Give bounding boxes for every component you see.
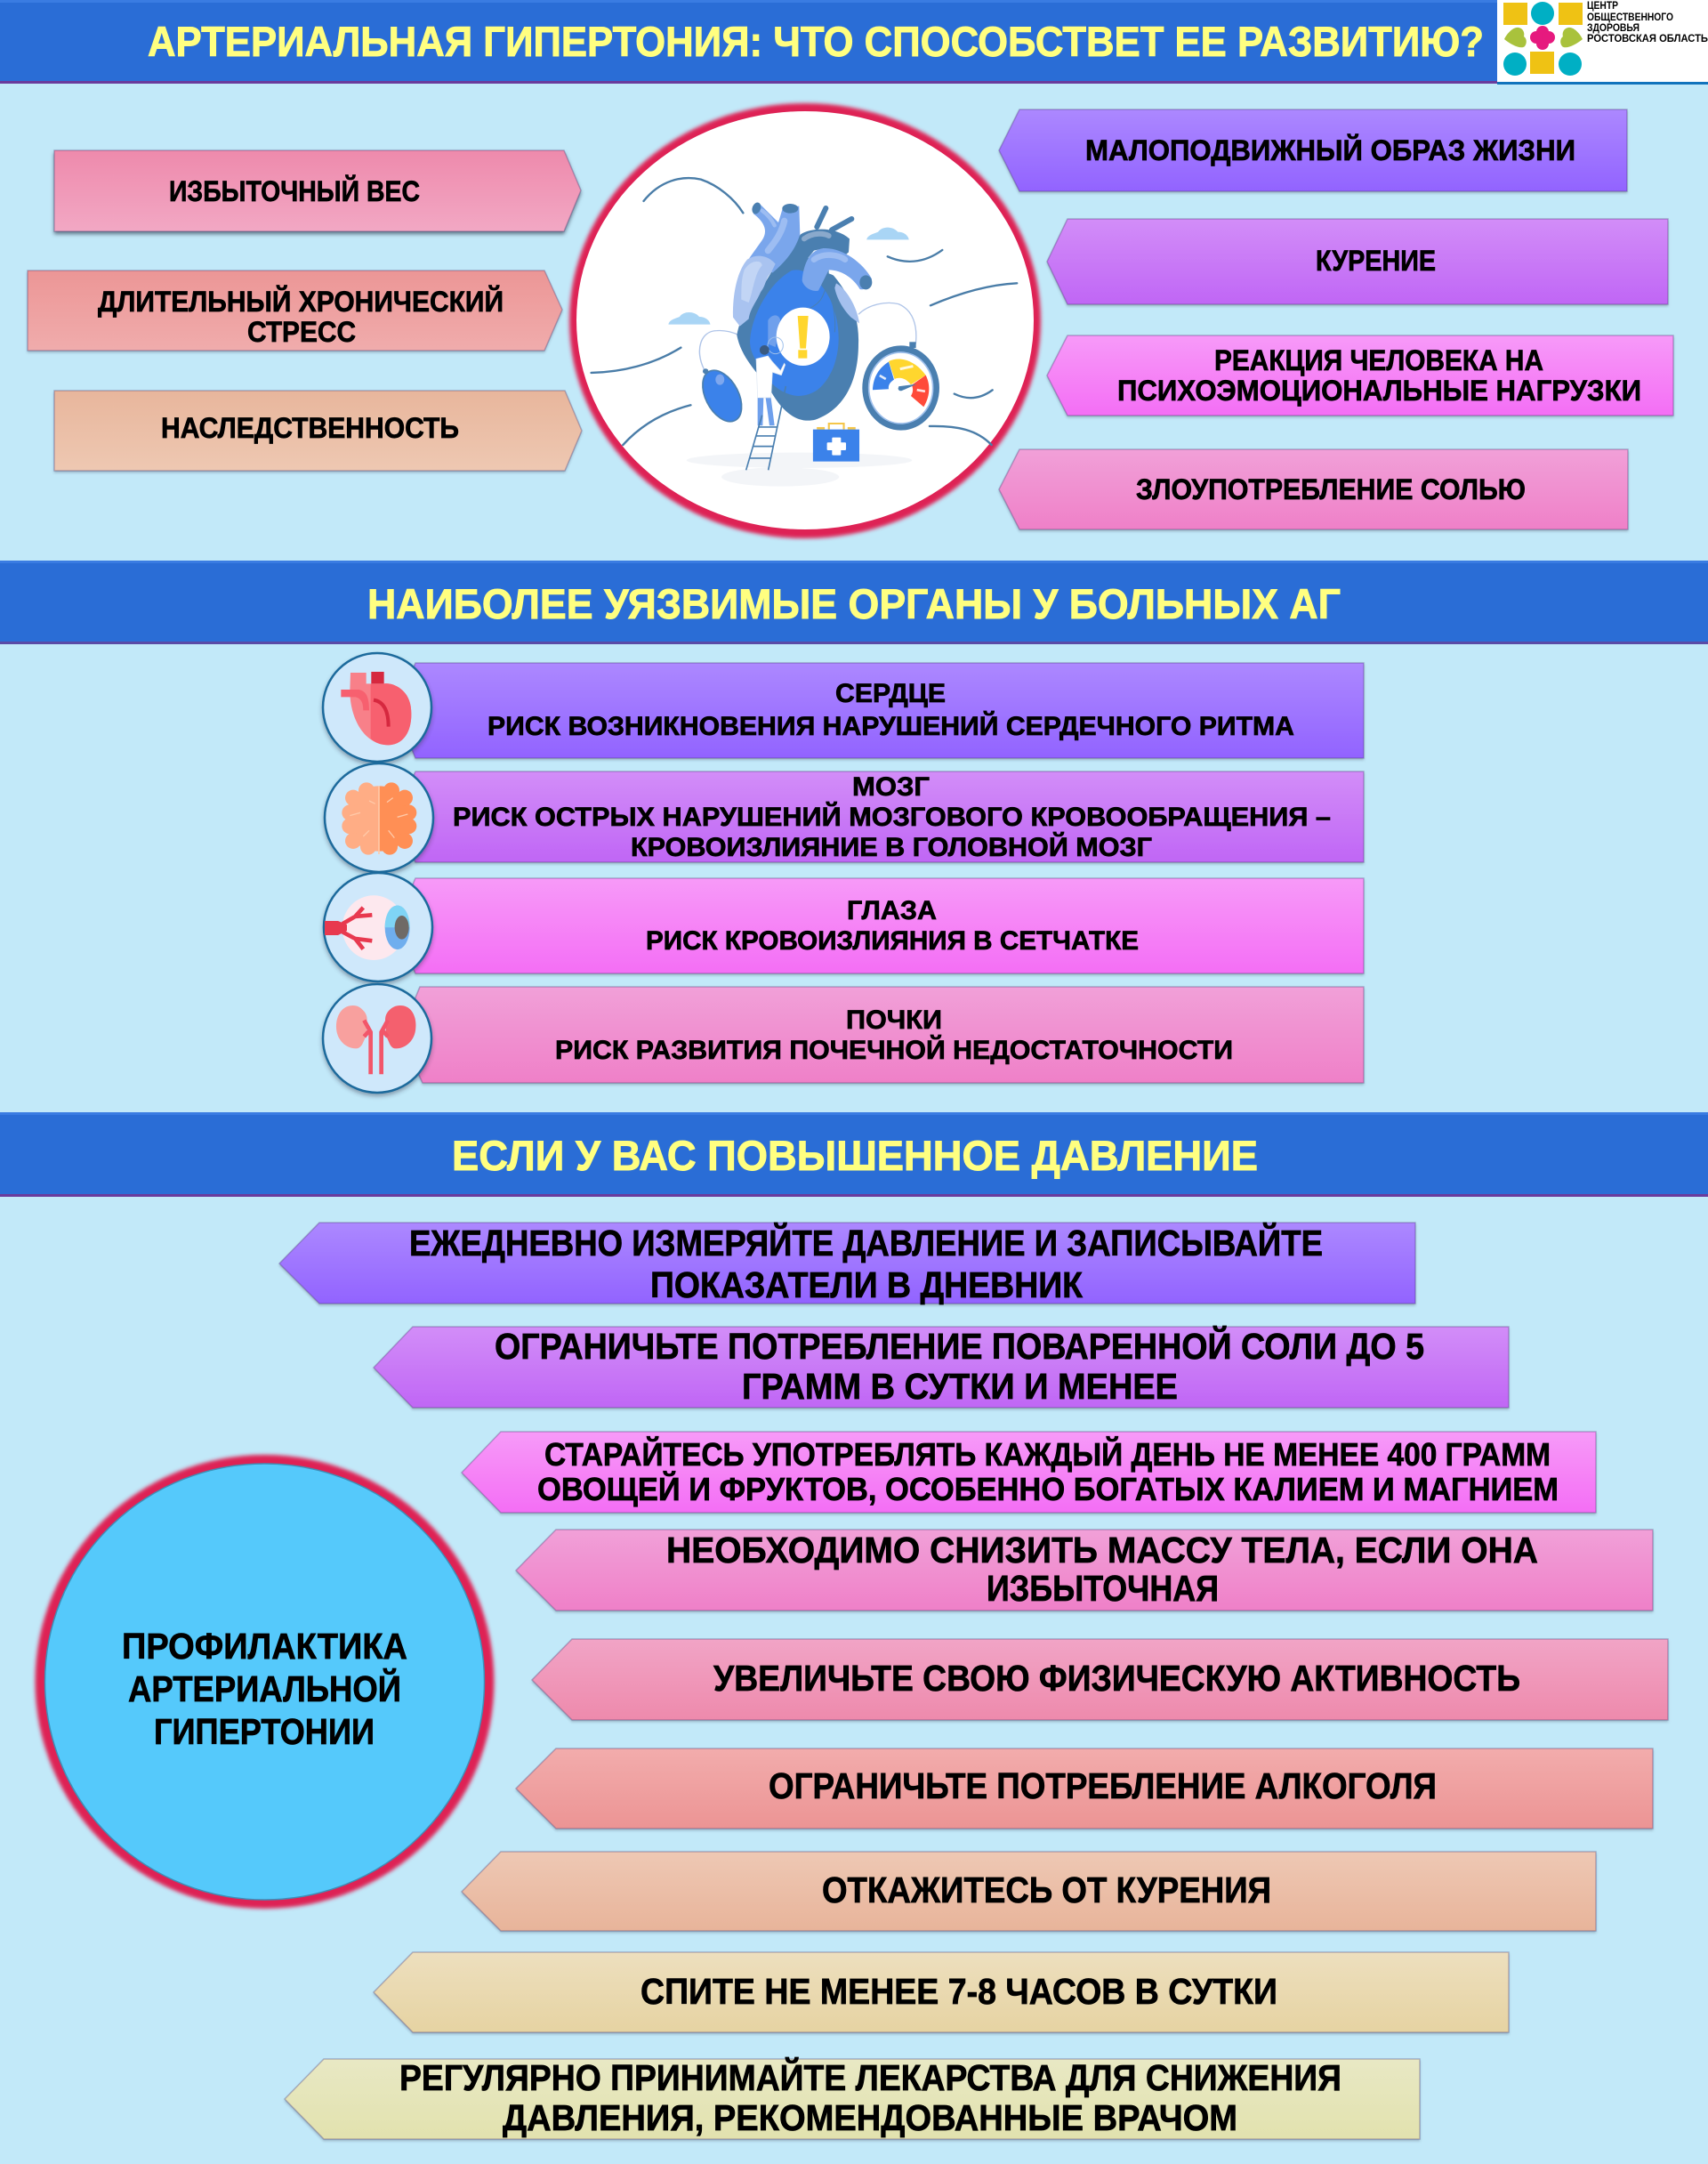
advice: ограничьте соль: ГРАММ В СУТКИ И МЕНЕЕ [742, 1366, 1178, 1407]
advice: ограничьте соль: ОГРАНИЧЬТЕ ПОТРЕБЛЕНИЕ ПОВАРЕННОЙ СОЛИ ДО 5 [495, 1326, 1424, 1367]
illustration: heart with exclamation mark, doctor, gauge [733, 201, 939, 470]
panel: risk factors left [28, 150, 582, 471]
factor: длительный хронический стресс: ДЛИТЕЛЬНЫЙ ХРОНИЧЕСКИЙ [98, 286, 504, 318]
factor: реакция на психоэмоциональные нагрузки: ПСИХОЭМОЦИОНАЛЬНЫЕ НАГРУЗКИ [1117, 375, 1641, 407]
panel: vulnerable organs [323, 653, 1364, 1093]
panel: prevention advice [279, 1223, 1668, 2139]
section banner: если у вас повышенное давление [0, 1112, 1708, 1197]
advice: лекарства: РЕГУЛЯРНО ПРИНИМАЙТЕ ЛЕКАРСТВА ДЛЯ СНИЖЕНИЯ [399, 2057, 1341, 2098]
advice: снизить массу тела: НЕОБХОДИМО СНИЗИТЬ МАССУ ТЕЛА, ЕСЛИ ОНА [666, 1530, 1538, 1571]
advice: сон: СПИТЕ НЕ МЕНЕЕ 7-8 ЧАСОВ В СУТКИ [640, 1971, 1277, 2012]
panel: risk factors right [999, 109, 1673, 529]
organ bar: мозг: РИСК ОСТРЫХ НАРУШЕНИЙ МОЗГОВОГО КРОВООБРАЩЕНИЯ – [453, 802, 1331, 832]
icon: heart [323, 653, 431, 762]
factor: курение: КУРЕНИЕ [1316, 245, 1436, 277]
advice: овощи и фрукты: ОВОЩЕЙ И ФРУКТОВ, ОСОБЕННО БОГАТЫХ КАЛИЕМ И МАГНИЕМ [537, 1470, 1559, 1507]
organ bar: почки: РИСК РАЗВИТИЯ ПОЧЕЧНОЙ НЕДОСТАТОЧНОСТИ [555, 1035, 1233, 1065]
logo: центр общественного здоровья: ЗДОРОВЬЯ [1587, 23, 1640, 34]
organ bar: почки: ПОЧКИ [846, 1005, 942, 1035]
advice: овощи и фрукты [462, 1432, 1596, 1513]
factor: малоподвижный образ жизни [999, 109, 1627, 191]
factor: злоупотребление солью: ЗЛОУПОТРЕБЛЕНИЕ СОЛЬЮ [1136, 473, 1526, 505]
header banner [0, 0, 1708, 84]
organ bar: сердце: РИСК ВОЗНИКНОВЕНИЯ НАРУШЕНИЙ СЕРДЕЧНОГО РИТМА [487, 711, 1294, 741]
advice: лекарства: ДАВЛЕНИЯ, РЕКОМЕНДОВАННЫЕ ВРАЧОМ [503, 2097, 1237, 2138]
logo: центр общественного здоровья [1497, 0, 1708, 85]
heading: НАИБОЛЕЕ УЯЗВИМЫЕ ОРГАНЫ У БОЛЬНЫХ АГ [367, 580, 1341, 627]
factor: реакция на психоэмоциональные нагрузки [1047, 335, 1673, 416]
advice: курение: ОТКАЖИТЕСЬ ОТ КУРЕНИЯ [822, 1869, 1271, 1910]
advice: снизить массу тела: ИЗБЫТОЧНАЯ [987, 1568, 1219, 1609]
advice: измеряйте давление [279, 1223, 1415, 1305]
section banner: наиболее уязвимые органы [0, 561, 1708, 644]
advice: физическая активность [532, 1639, 1668, 1720]
factor: наследственность [54, 391, 582, 471]
icon: eye [324, 873, 432, 981]
prevention circle [36, 1455, 495, 1909]
prevention title [122, 1626, 407, 1752]
advice: алкоголь: ОГРАНИЧЬТЕ ПОТРЕБЛЕНИЕ АЛКОГОЛЯ [769, 1765, 1437, 1806]
organ bar: глаза: РИСК КРОВОИЗЛИЯНИЯ В СЕТЧАТКЕ [646, 926, 1139, 956]
organ bar: мозг: МОЗГ [852, 772, 930, 802]
title: АРТЕРИАЛЬНАЯ ГИПЕРТОНИЯ: ЧТО СПОСОБСТВЕТ ЕЕ РАЗВИТИЮ? [148, 18, 1484, 65]
organ bar: глаза [396, 878, 1364, 973]
factor: избыточный вес: ИЗБЫТОЧНЫЙ ВЕС [169, 175, 420, 207]
advice: физическая активность: УВЕЛИЧЬТЕ СВОЮ ФИЗИЧЕСКУЮ АКТИВНОСТЬ [713, 1658, 1520, 1699]
prevention title: АРТЕРИАЛЬНОЙ [128, 1668, 401, 1709]
advice: измеряйте давление: ЕЖЕДНЕВНО ИЗМЕРЯЙТЕ ДАВЛЕНИЕ И ЗАПИСЫВАЙТЕ [409, 1223, 1323, 1264]
advice: ограничьте соль [374, 1326, 1509, 1408]
advice: алкоголь [516, 1748, 1653, 1829]
organ bar: сердце [396, 663, 1364, 758]
advice: снизить массу тела [516, 1530, 1653, 1611]
factor: курение [1047, 219, 1668, 304]
prevention title: ПРОФИЛАКТИКА [122, 1626, 407, 1667]
advice: курение [462, 1852, 1596, 1931]
advice: измеряйте давление: ПОКАЗАТЕЛИ В ДНЕВНИК [650, 1264, 1084, 1305]
factor: длительный хронический стресс: СТРЕСС [247, 316, 356, 348]
organ bar: глаза: ГЛАЗА [847, 896, 937, 925]
factor: реакция на психоэмоциональные нагрузки: РЕАКЦИЯ ЧЕЛОВЕКА НА [1214, 344, 1543, 376]
factor: злоупотребление солью [999, 449, 1628, 529]
icon: kidneys [323, 984, 431, 1093]
logo: центр общественного здоровья: ОБЩЕСТВЕННОГО [1587, 12, 1673, 23]
organ bar: почки [400, 987, 1364, 1083]
factor: малоподвижный образ жизни: МАЛОПОДВИЖНЫЙ ОБРАЗ ЖИЗНИ [1085, 134, 1575, 166]
central circle with heart illustration [569, 103, 1041, 538]
prevention title: ГИПЕРТОНИИ [154, 1711, 375, 1752]
advice: лекарства [285, 2057, 1420, 2139]
factor: длительный хронический стресс [28, 270, 562, 351]
advice: сон [374, 1952, 1509, 2032]
organ bar: сердце: СЕРДЦЕ [835, 679, 946, 708]
logo: центр общественного здоровья: ЦЕНТР [1587, 1, 1618, 12]
factor: наследственность: НАСЛЕДСТВЕННОСТЬ [161, 412, 459, 444]
factor: избыточный вес [54, 150, 581, 231]
illustration: lines, clouds, bulb, first-aid kit [592, 178, 1017, 487]
organ bar: мозг: КРОВОИЗЛИЯНИЕ В ГОЛОВНОЙ МОЗГ [631, 832, 1152, 862]
icon: brain [325, 763, 433, 872]
logo: центр общественного здоровья: РОСТОВСКАЯ ОБЛАСТЬ [1587, 34, 1708, 44]
heading: ЕСЛИ У ВАС ПОВЫШЕННОЕ ДАВЛЕНИЕ [452, 1132, 1258, 1179]
advice: овощи и фрукты: СТАРАЙТЕСЬ УПОТРЕБЛЯТЬ КАЖДЫЙ ДЕНЬ НЕ МЕНЕЕ 400 ГРАММ [544, 1435, 1551, 1473]
organ bar: мозг [396, 771, 1364, 862]
